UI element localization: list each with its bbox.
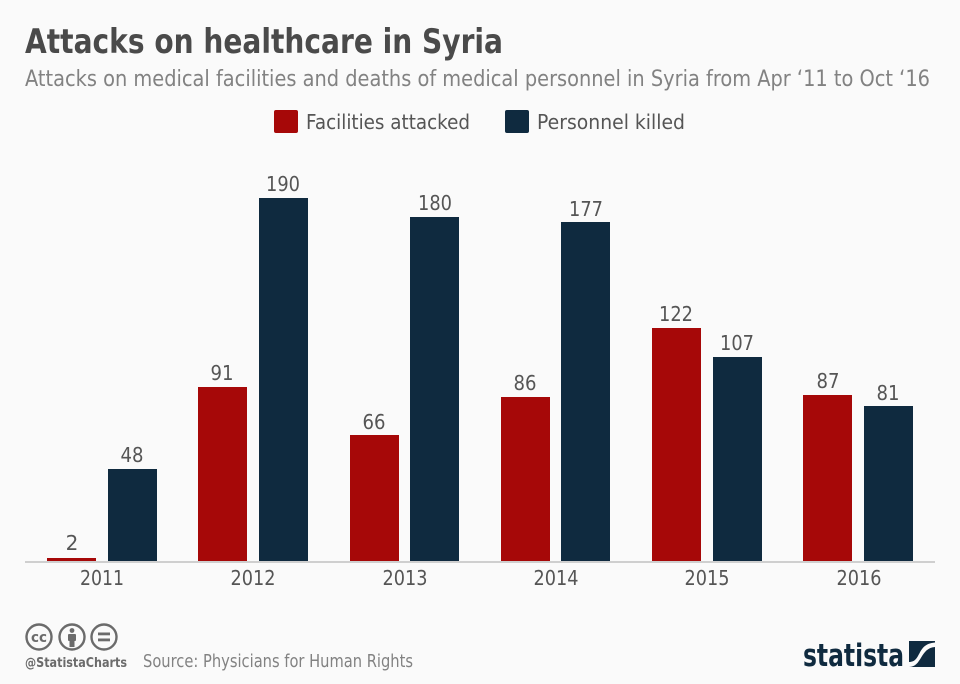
- icon: cc license: [26, 624, 116, 650]
- group: 2015: 107: [720, 331, 754, 355]
- group: 2011: 2011: [80, 566, 124, 590]
- legend: personnel killed: Personnel killed: [537, 110, 685, 134]
- group: 2015: [652, 302, 762, 590]
- group: 2013: [350, 191, 459, 590]
- group: 2012: 2012: [230, 566, 276, 590]
- group: 2016: 81: [876, 381, 900, 405]
- group: 2012: 91: [210, 361, 234, 385]
- source: Source: Physicians for Human Rights: [143, 652, 413, 672]
- logo: statista: statista: [803, 638, 904, 674]
- group: 2016: 2016: [836, 566, 882, 590]
- group: 2014: [501, 197, 610, 590]
- group: 2015: 2015: [684, 566, 730, 590]
- title: Attacks on healthcare in Syria: [25, 22, 503, 62]
- group: 2014: 2014: [534, 566, 578, 590]
- group: 2013: 66: [362, 410, 386, 434]
- group: 2012: 190: [266, 172, 300, 196]
- group: 2011: [47, 443, 157, 590]
- group: 2016: [803, 369, 913, 590]
- group: 2016: 87: [816, 369, 840, 393]
- group: 2014: 177: [569, 197, 603, 221]
- group: 2011: 48: [120, 443, 144, 467]
- group: 2013: 180: [418, 191, 452, 215]
- legend: [274, 110, 685, 134]
- group: 2015: 122: [659, 302, 693, 326]
- legend: facilities attacked: Facilities attacked: [306, 110, 470, 134]
- axis line: [25, 561, 935, 563]
- icon: cc license: cc: [31, 630, 47, 646]
- bar chart: [25, 172, 935, 590]
- group: 2012: [198, 172, 308, 590]
- handle: @StatistaCharts: [25, 656, 127, 671]
- group: 2013: 2013: [382, 566, 428, 590]
- group: 2014: 86: [514, 371, 536, 395]
- group: 2011: 2: [66, 531, 78, 555]
